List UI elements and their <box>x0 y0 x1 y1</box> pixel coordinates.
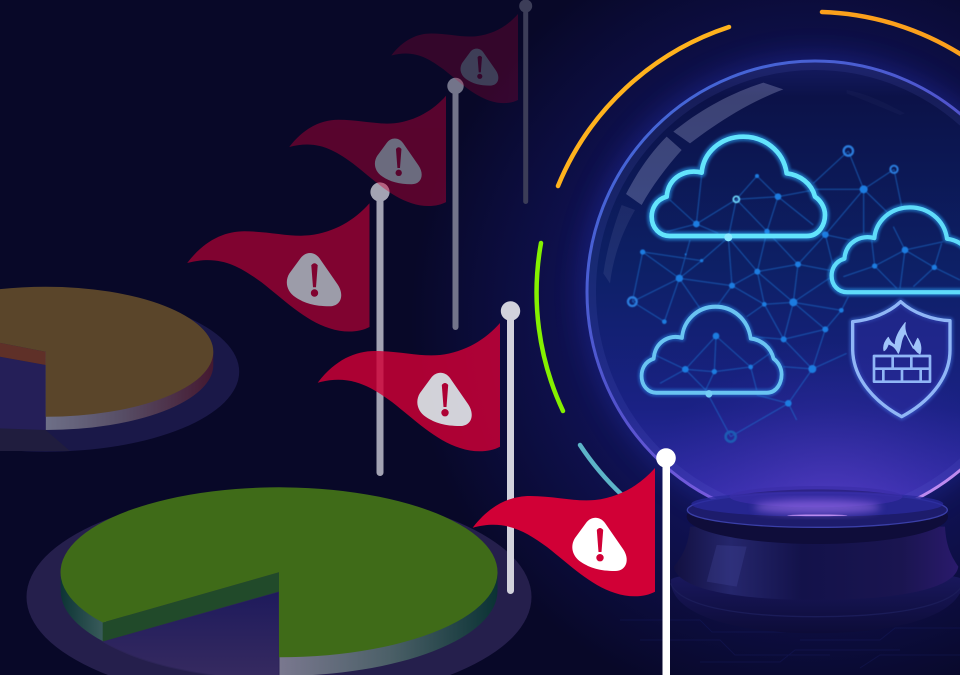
glass highlight streaks <box>603 83 905 283</box>
pole: left <box>370 182 390 476</box>
flag: left warning pennant <box>187 203 370 332</box>
cloud glow <box>832 207 960 292</box>
cloud outline <box>642 307 782 393</box>
icon: lower neon cloud <box>642 307 782 398</box>
flag: front warning pennant <box>473 468 655 596</box>
stand skirt shine <box>707 545 747 587</box>
sphere inner band <box>592 66 960 518</box>
brick wall <box>874 356 930 382</box>
arc: green <box>537 243 563 411</box>
pie chart: green <box>26 487 532 675</box>
stand light line <box>787 514 847 516</box>
stand top ellipse <box>691 491 943 517</box>
arc: orange <box>822 12 960 57</box>
shield glow <box>853 302 950 417</box>
pole: front <box>656 448 676 675</box>
background glow <box>380 0 960 675</box>
stand lower plinth <box>671 570 960 633</box>
icon: firewall shield <box>853 302 950 417</box>
stand skirt <box>674 527 958 600</box>
pole: farthest <box>519 0 532 204</box>
pie top <box>0 287 213 417</box>
stand collar <box>687 489 948 544</box>
network of nodes inside sphere <box>628 146 960 442</box>
sphere rim <box>587 61 960 523</box>
pie rim <box>61 572 497 675</box>
pie chart: faded yellow <box>0 287 239 452</box>
network nodes <box>640 174 937 407</box>
cloud outline <box>832 207 960 292</box>
sphere lower light <box>586 60 960 524</box>
crystal ball stand <box>671 486 960 633</box>
cloud outline <box>652 137 825 236</box>
cloud outline nodes <box>724 233 732 241</box>
sphere outer glow <box>583 57 960 527</box>
flame <box>884 323 921 354</box>
pie cut floor <box>0 355 46 430</box>
pie plate shadow <box>0 425 70 451</box>
arc: teal <box>580 445 622 495</box>
pie rim <box>46 352 213 430</box>
sphere body <box>586 60 960 524</box>
stand plinth line <box>671 583 960 617</box>
flag: middle warning pennant <box>318 323 500 451</box>
orbit arcs around the crystal ball <box>537 12 960 495</box>
stand inner plate <box>729 486 903 507</box>
pie cut wall <box>0 341 46 365</box>
icon: right neon cloud <box>832 207 960 292</box>
pie cut wall <box>103 572 279 642</box>
cloud outline node <box>705 390 712 398</box>
pole: fourth <box>447 78 464 330</box>
icon: large neon cloud <box>652 137 825 241</box>
shield outline <box>853 302 950 417</box>
circuit pattern on floor <box>620 620 960 668</box>
network lines <box>632 151 960 437</box>
pie top <box>61 487 498 657</box>
network ring nodes <box>628 146 898 442</box>
cloud glow <box>652 137 825 236</box>
stand light glow <box>754 500 881 515</box>
icon: warning triangle <box>572 518 627 571</box>
flag: fourth warning pennant <box>289 96 446 206</box>
pie plate <box>0 292 239 452</box>
stand collar ring <box>687 493 947 527</box>
flag: farthest warning pennant <box>391 14 518 103</box>
pie cut floor <box>103 592 279 675</box>
pie plate <box>26 491 532 675</box>
cloud glow <box>642 307 782 393</box>
crystal ball glass sphere <box>583 57 960 527</box>
pole: middle <box>501 301 520 594</box>
arc: yellow <box>558 27 729 186</box>
